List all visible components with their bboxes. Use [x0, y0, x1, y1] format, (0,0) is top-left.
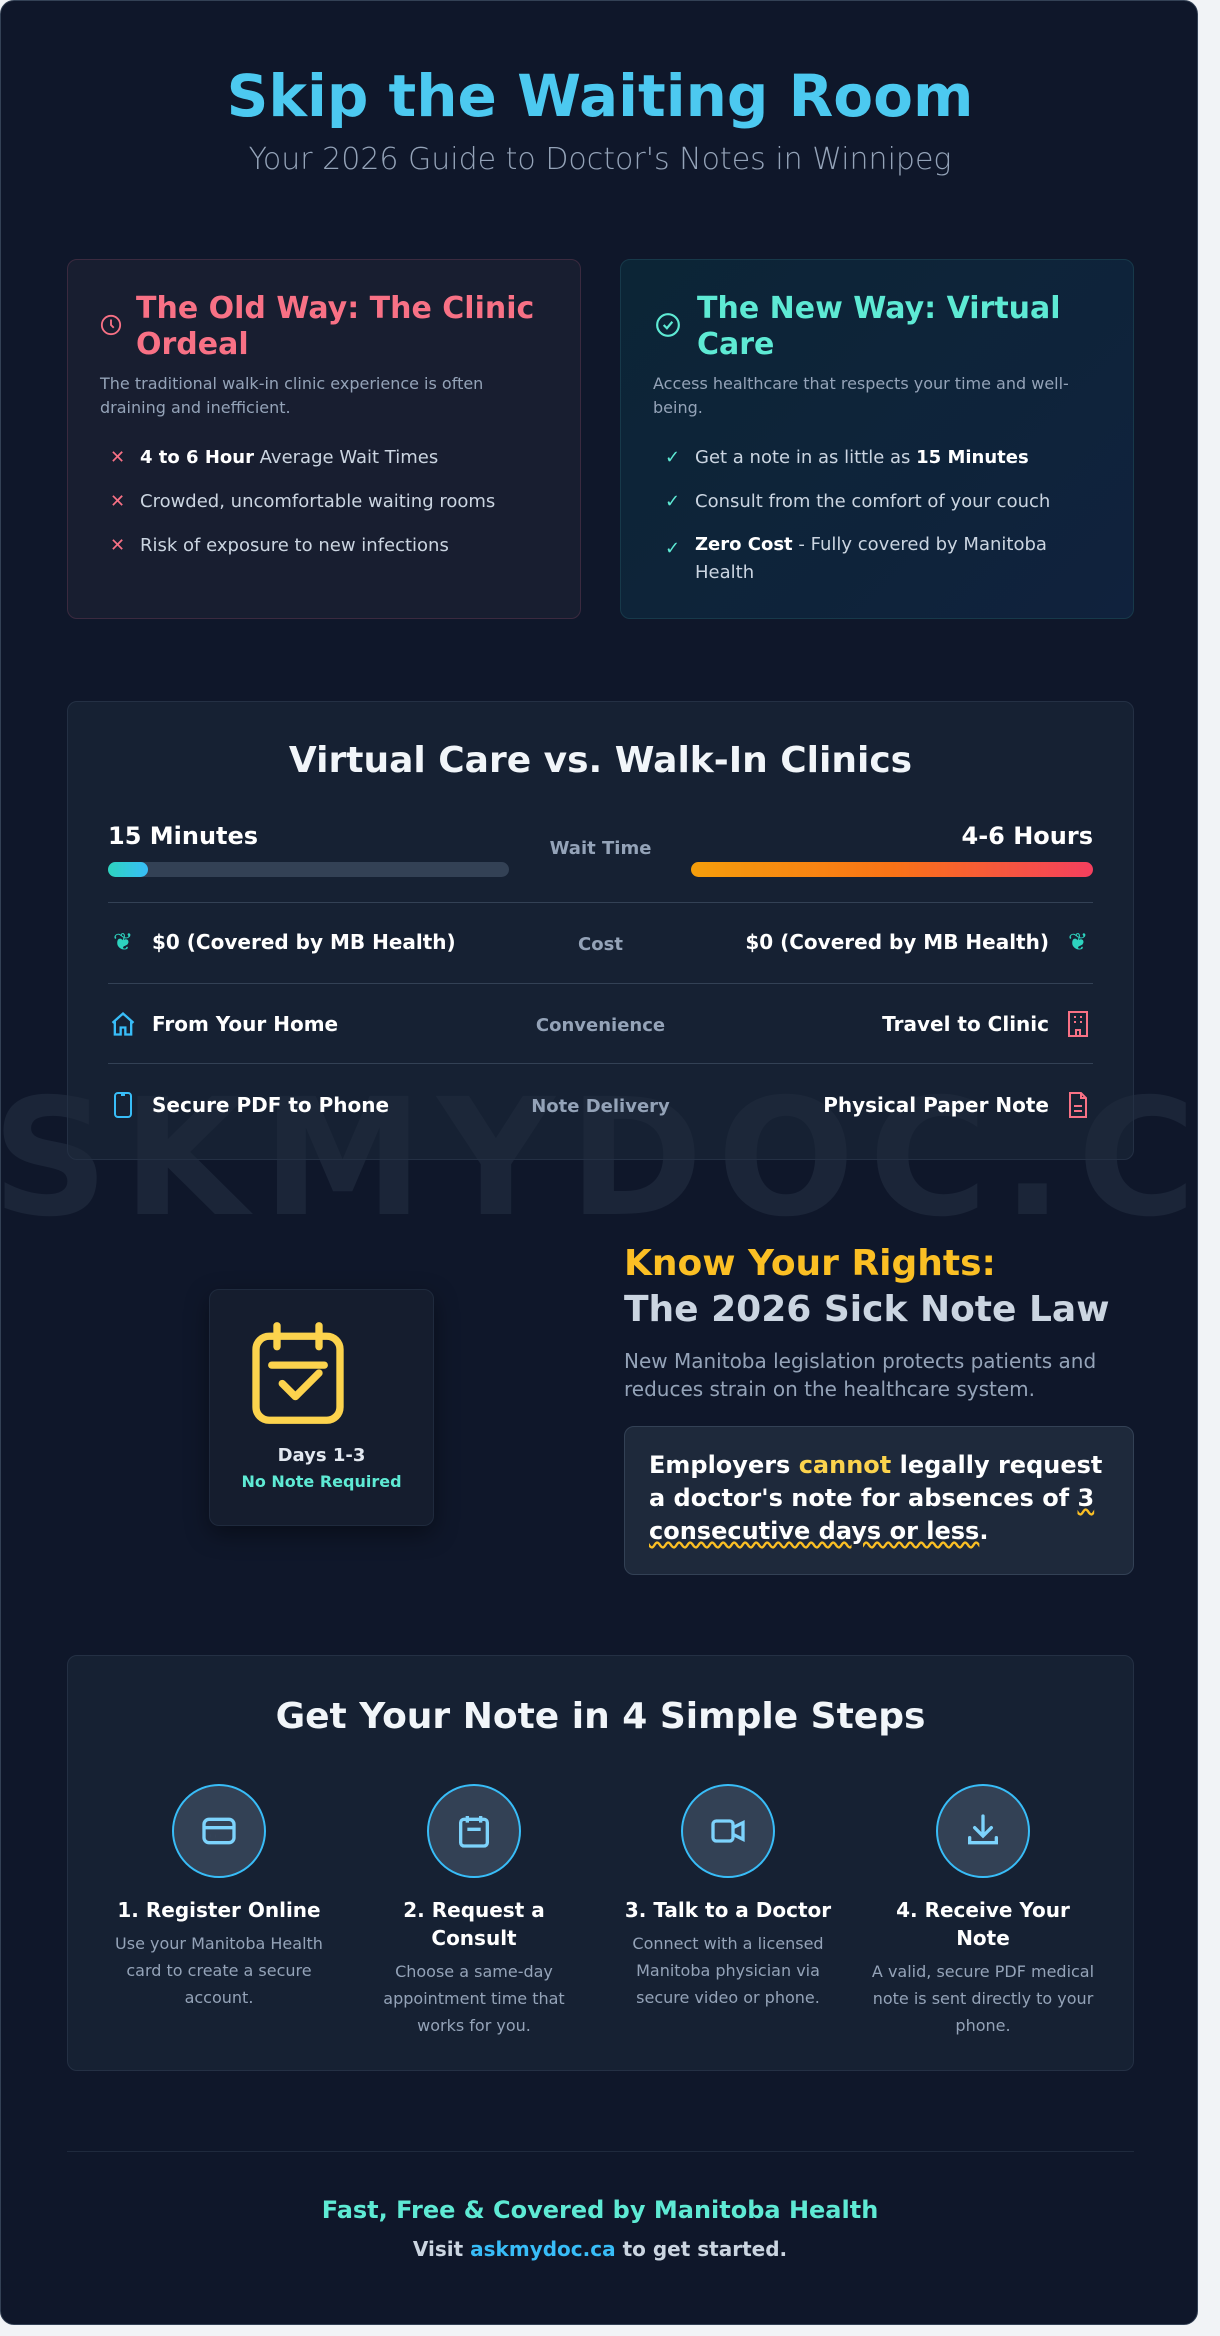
- row: cost: Cost: [578, 934, 623, 955]
- heading: know your rights: [624, 1243, 1109, 1330]
- heading: Virtual Care vs. Walk-In Clinics: [289, 740, 912, 781]
- description: The traditional walk-in clinic experience is often draining and inefficient.: [100, 374, 483, 417]
- step 4: A valid, secure PDF medical note is sent directly to your phone.: [872, 1962, 1094, 2035]
- bar: clinic: [691, 862, 1093, 877]
- list: Consult from the comfort of your couch: [695, 491, 1050, 512]
- step 4: 4. Receive Your Note: [896, 1898, 1070, 1950]
- description: Access healthcare that respects your time and well-being.: [653, 374, 1069, 417]
- subtitle: Your 2026 Guide to Doctor's Notes in Winnipeg: [249, 142, 951, 177]
- row: cost: ❦: [1068, 928, 1088, 956]
- row: wait time: 15 Minutes: [108, 822, 258, 850]
- list: 4 to 6 Hour Average Wait Times: [140, 447, 438, 468]
- bar: virtual: [108, 862, 509, 877]
- list: ✕: [110, 535, 125, 556]
- list: ✓: [665, 538, 680, 559]
- footer tagline: Fast, Free & Covered by Manitoba Health: [322, 2196, 878, 2224]
- text: rights description: New Manitoba legislation protects patients and reduces strain on the healthcare system.: [624, 1349, 1096, 1401]
- icon: clock: [100, 314, 122, 336]
- panel: old way: [67, 259, 581, 619]
- row: wait time: Wait Time: [550, 838, 651, 859]
- row: convenience: [112, 1011, 1088, 1037]
- title: Skip the Waiting Room: [227, 62, 973, 130]
- row: note delivery: Note Delivery: [531, 1096, 670, 1117]
- row: cost: [113, 928, 1088, 956]
- row: wait time: 4-6 Hours: [962, 822, 1093, 850]
- list: ✓: [665, 491, 680, 512]
- footer cta: Visit askmydoc.ca to get started.: [413, 2237, 787, 2261]
- panel: steps: [67, 1655, 1134, 2071]
- heading: The Old Way: The Clinic Ordeal: [136, 291, 534, 362]
- row: cost: $0 (Covered by MB Health): [745, 930, 1049, 954]
- row: convenience: Travel to Clinic: [882, 1012, 1049, 1036]
- step 3: 3. Talk to a Doctor: [625, 1898, 831, 1922]
- list: [665, 447, 1050, 583]
- heading: Get Your Note in 4 Simple Steps: [276, 1696, 925, 1737]
- step 1: 1. Register Online: [117, 1898, 321, 1922]
- row: wait time: [108, 822, 1093, 877]
- step 3: Connect with a licensed Manitoba physician via secure video or phone.: [632, 1934, 824, 2007]
- row: convenience: Convenience: [536, 1015, 665, 1036]
- list: Crowded, uncomfortable waiting rooms: [140, 491, 495, 512]
- list: ✕: [110, 447, 125, 468]
- list: Zero Cost - Fully covered by Manitoba Health: [695, 534, 1047, 583]
- row: note delivery: Secure PDF to Phone: [152, 1093, 389, 1117]
- step 1: [115, 1784, 323, 2007]
- card: days 1-3: [209, 1289, 434, 1526]
- list: Risk of exposure to new infections: [140, 535, 449, 556]
- step 2: Choose a same-day appointment time that works for you.: [383, 1962, 565, 2035]
- heading: The New Way: Virtual Care: [697, 291, 1061, 362]
- heading: know your rights: Know Your Rights:: [624, 1243, 996, 1284]
- list: ✕: [110, 491, 125, 512]
- icon: calendar check: [252, 1322, 344, 1424]
- label: Days 1-3: [278, 1445, 365, 1466]
- step 4: [872, 1784, 1094, 2035]
- step 2: 2. Request a Consult: [403, 1898, 545, 1950]
- list: [110, 447, 495, 556]
- panel: new way: [620, 259, 1134, 619]
- row: convenience: From Your Home: [152, 1012, 338, 1036]
- card: days 1-3: No Note Required: [241, 1472, 402, 1491]
- row: cost: $0 (Covered by MB Health): [152, 930, 456, 954]
- row: note delivery: Physical Paper Note: [823, 1093, 1049, 1117]
- list: ✓: [665, 447, 680, 468]
- panel: comparison: [67, 701, 1134, 1160]
- heading: know your rights: The 2026 Sick Note Law: [624, 1289, 1109, 1330]
- list: Get a note in as little as 15 Minutes: [695, 447, 1029, 468]
- step 3: [625, 1784, 832, 2007]
- callout: law: [624, 1426, 1134, 1575]
- row: note delivery: [114, 1092, 1087, 1118]
- step 2: [383, 1784, 565, 2035]
- step 1: Use your Manitoba Health card to create a secure account.: [115, 1934, 323, 2007]
- icon: check circle: [656, 313, 680, 337]
- row: cost: ❦: [113, 928, 133, 956]
- callout: law: Employers cannot legally request a doctor's note for absences of 3 consecutive days or less.: [649, 1451, 1102, 1545]
